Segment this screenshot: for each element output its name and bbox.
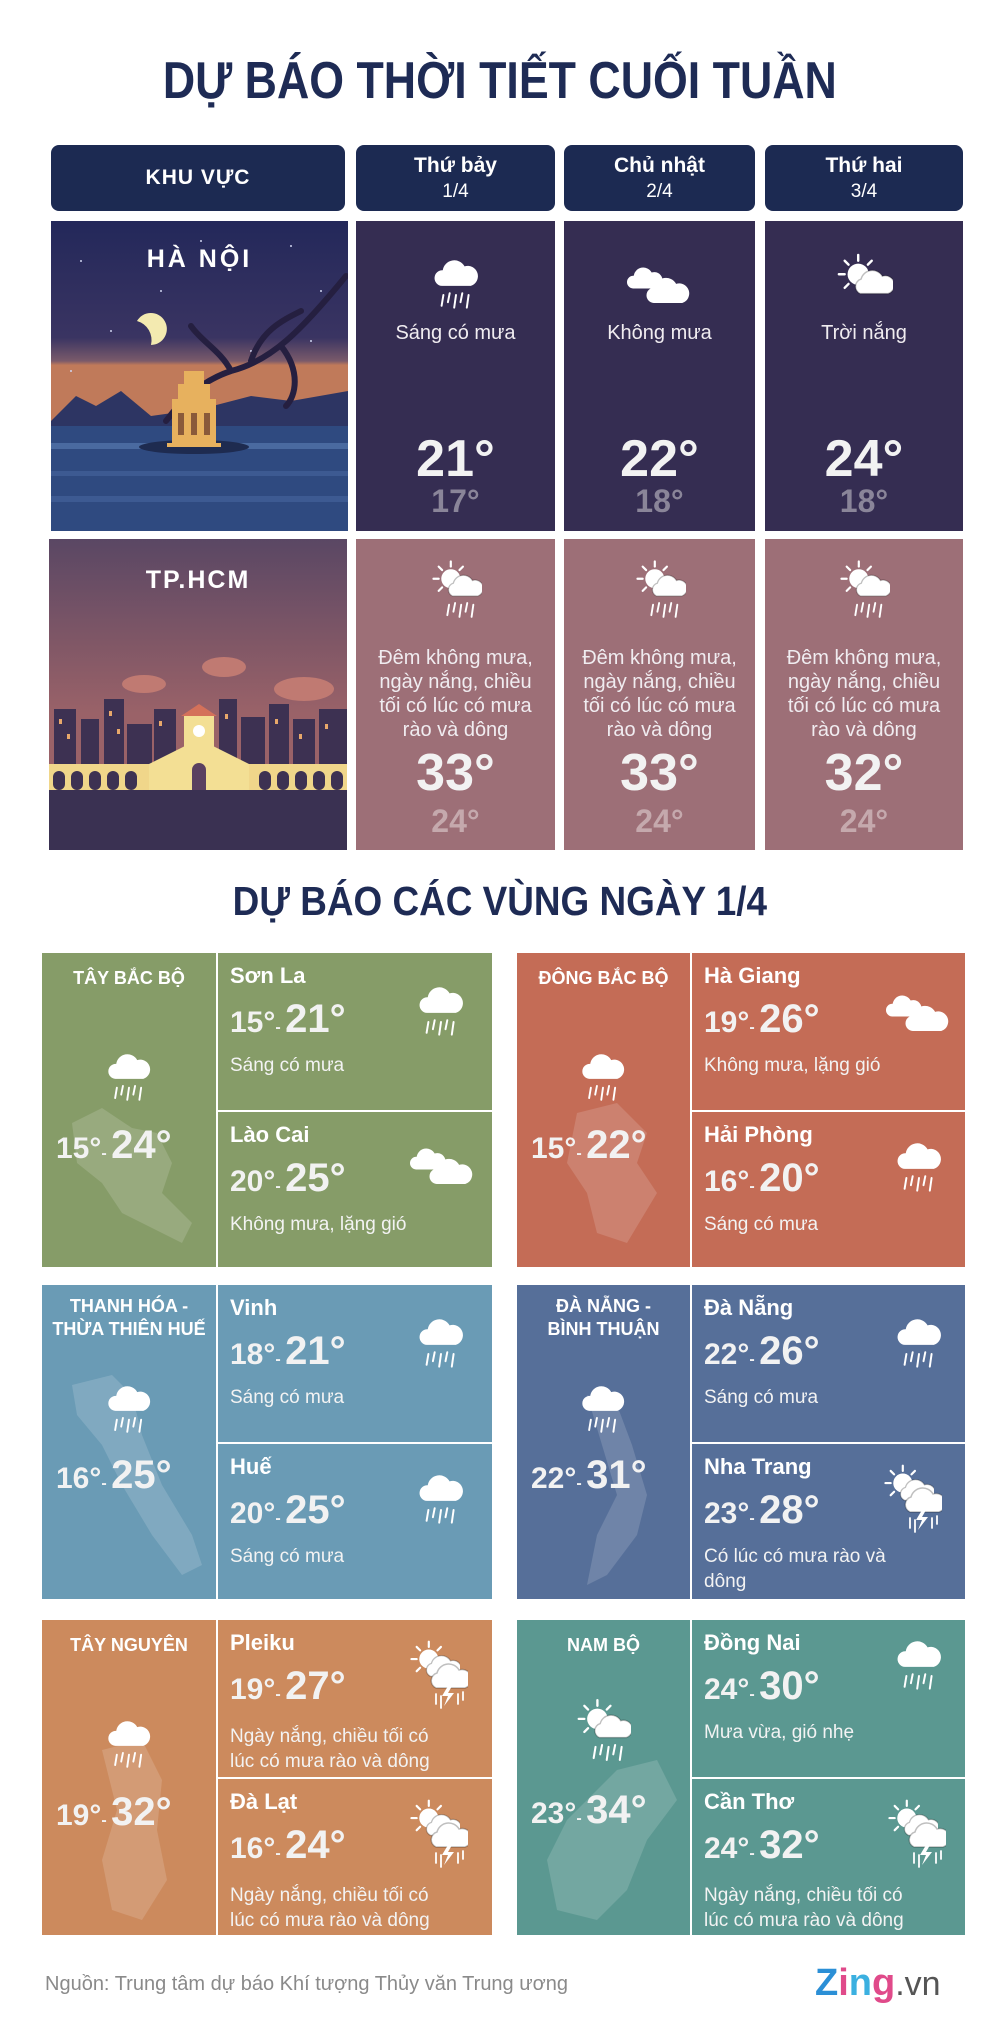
panel: tay nguyen: 19°- 27° (230, 1664, 346, 1708)
panel: dong bac bo (517, 953, 965, 1267)
panel: nam bo: lúc có mưa rào và dông (704, 1910, 904, 1931)
heading: regional forecast: DỰ BÁO CÁC VÙNG NGÀY 1/4 (233, 878, 767, 924)
panel: thanh hoa - thua thien hue: 18°- 21° (230, 1329, 346, 1373)
panel: tay bac bo: Sơn La (230, 963, 306, 988)
panel: tay nguyen: TÂY NGUYÊN (70, 1635, 188, 1655)
panel: ha noi saturday: 21° (416, 430, 495, 488)
header: chu nhat (564, 145, 755, 211)
panel: nam bo: 23°- 34° (531, 1788, 647, 1832)
panel: ha noi monday: 24° (825, 430, 903, 488)
header: chu nhat: Chủ nhật (614, 154, 705, 177)
logo: zing.vn: Zing.vn (815, 1962, 941, 2004)
panel: ha noi monday: 18° (840, 483, 888, 519)
panel: da nang - binh thuan: ĐÀ NẴNG - (556, 1296, 651, 1316)
panel: da nang - binh thuan (517, 1285, 965, 1599)
panel: hcm sunday: 33° (620, 744, 699, 802)
panel: tay nguyen: Ngày nắng, chiều tối có (230, 1726, 429, 1747)
panel: hcm monday: 32° (825, 744, 903, 802)
panel: tay bac bo: 15°- 24° (56, 1123, 172, 1167)
panel: nam bo: 24°- 30° (704, 1664, 820, 1708)
panel: hcm saturday: rào và dông (403, 719, 508, 741)
header: thu bay: Thứ bảy (414, 154, 497, 177)
panel: hcm sunday: rào và dông (607, 719, 712, 741)
header: khu vuc (51, 145, 345, 211)
label: tp.hcm: TP.HCM (146, 566, 250, 594)
panel: hcm saturday: 33° (416, 744, 495, 802)
panel: tay nguyen: Pleiku (230, 1630, 295, 1655)
panel: hcm monday: Đêm không mưa, (787, 647, 941, 669)
panel: tay bac bo: Lào Cai (230, 1122, 309, 1147)
panel: ha noi monday (765, 221, 963, 531)
panel: nam bo: Ngày nắng, chiều tối có (704, 1885, 903, 1906)
panel: da nang - binh thuan: Sáng có mưa (704, 1387, 818, 1408)
panel: ha noi illustration (51, 221, 348, 531)
panel: thanh hoa - thua thien hue: Sáng có mưa (230, 1546, 344, 1567)
panel: hcm saturday: tối có lúc có mưa (379, 695, 532, 717)
panel: da nang - binh thuan: Nha Trang (704, 1454, 812, 1479)
panel: dong bac bo: 15°- 22° (531, 1123, 647, 1167)
panel: tay bac bo: 20°- 25° (230, 1156, 346, 1200)
panel: hcm sunday: tối có lúc có mưa (583, 695, 736, 717)
panel: hcm monday: ngày nắng, chiều (788, 671, 940, 693)
panel: thanh hoa - thua thien hue (42, 1285, 492, 1599)
panel: tay bac bo: TÂY BẮC BỘ (73, 968, 185, 988)
panel: tay nguyen: lúc có mưa rào và dông (230, 1751, 430, 1772)
title: DỰ BÁO THỜI TIẾT CUỐI TUẦN (163, 52, 837, 110)
panel: dong bac bo: ĐÔNG BẮC BỘ (538, 968, 668, 988)
panel: thanh hoa - thua thien hue: THANH HÓA - (70, 1296, 188, 1316)
panel: tay nguyen: 19°- 32° (56, 1790, 172, 1834)
icon: sun cloud rain (840, 560, 890, 618)
panel: hcm monday: 24° (840, 803, 888, 839)
panel: tay bac bo (42, 953, 492, 1267)
panel: dong bac bo: Hà Giang (704, 963, 801, 988)
panel: dong bac bo: 16°- 20° (704, 1156, 820, 1200)
panel: dong bac bo: Không mưa, lặng gió (704, 1055, 880, 1076)
panel: nam bo: Đồng Nai (704, 1630, 801, 1655)
icon: clouds (627, 268, 690, 303)
panel: thanh hoa - thua thien hue: 16°- 25° (56, 1453, 172, 1497)
panel: tay nguyen: Ngày nắng, chiều tối có (230, 1885, 429, 1906)
panel: hcm saturday (356, 539, 555, 850)
panel: tay nguyen: lúc có mưa rào và dông (230, 1910, 430, 1931)
panel: hcm illustration (49, 539, 347, 850)
panel: ha noi sunday (564, 221, 755, 531)
header: thu hai: 3/4 (851, 181, 877, 202)
panel: da nang - binh thuan: 22°- 26° (704, 1329, 820, 1373)
panel: hcm sunday: Đêm không mưa, (582, 647, 737, 669)
panel: nam bo: NAM BỘ (567, 1635, 640, 1655)
panel: ha noi sunday: 22° (620, 430, 699, 488)
panel: da nang - binh thuan: Đà Nẵng (704, 1295, 793, 1320)
icon: rain cloud (434, 260, 478, 309)
panel: nam bo: 24°- 32° (704, 1823, 820, 1867)
panel: ha noi sunday: 18° (635, 483, 684, 519)
panel: tay nguyen: 16°- 24° (230, 1823, 346, 1867)
icon: sun cloud rain (432, 560, 482, 618)
header: thu hai (765, 145, 963, 211)
panel: da nang - binh thuan: BÌNH THUẬN (548, 1319, 660, 1339)
panel: da nang - binh thuan: Có lúc có mưa rào và (704, 1546, 886, 1567)
panel: hcm sunday (564, 539, 755, 850)
panel: nam bo: Cần Thơ (704, 1789, 794, 1814)
panel: tay bac bo: Không mưa, lặng gió (230, 1214, 406, 1235)
panel: hcm monday (765, 539, 963, 850)
panel: hcm saturday: ngày nắng, chiều (379, 671, 532, 693)
panel: ha noi saturday: Sáng có mưa (395, 322, 516, 344)
panel: hcm saturday: 24° (431, 803, 480, 839)
panel: hcm monday: tối có lúc có mưa (788, 695, 940, 717)
panel: hcm sunday: 24° (635, 803, 684, 839)
panel: tay nguyen (42, 1620, 492, 1935)
header: thu bay: 1/4 (442, 181, 469, 202)
panel: thanh hoa - thua thien hue: THỪA THIÊN HUẾ (52, 1319, 206, 1339)
panel: nam bo: Mưa vừa, gió nhẹ (704, 1722, 854, 1743)
panel: dong bac bo: Hải Phòng (704, 1122, 813, 1147)
panel: thanh hoa - thua thien hue: Vinh (230, 1295, 277, 1320)
panel: hcm saturday: Đêm không mưa, (378, 647, 533, 669)
panel: ha noi monday: Trời nắng (821, 322, 907, 344)
header: khu vuc: KHU VỰC (146, 166, 250, 189)
header: chu nhat: 2/4 (646, 181, 673, 202)
panel: tay nguyen: Đà Lạt (230, 1789, 297, 1814)
panel: thanh hoa - thua thien hue: Sáng có mưa (230, 1387, 344, 1408)
icon: sun cloud (838, 254, 893, 294)
icon: sun cloud rain (636, 560, 686, 618)
panel: dong bac bo: 19°- 26° (704, 997, 820, 1041)
footer: source: Nguồn: Trung tâm dự báo Khí tượng Thủy văn Trung ương (45, 1973, 568, 1995)
panel: tay bac bo: Sáng có mưa (230, 1055, 344, 1076)
panel: tay bac bo: 15°- 21° (230, 997, 346, 1041)
panel: da nang - binh thuan: 23°- 28° (704, 1488, 820, 1532)
panel: dong bac bo: Sáng có mưa (704, 1214, 818, 1235)
header: thu bay (356, 145, 555, 211)
panel: thanh hoa - thua thien hue: Huế (230, 1454, 272, 1479)
label: ha noi: HÀ NỘI (147, 245, 252, 273)
panel: hcm monday: rào và dông (811, 719, 917, 741)
panel: ha noi saturday: 17° (431, 483, 480, 519)
panel: ha noi saturday (356, 221, 555, 531)
panel: hcm sunday: ngày nắng, chiều (583, 671, 736, 693)
panel: da nang - binh thuan: dông (704, 1571, 746, 1592)
panel: da nang - binh thuan: 22°- 31° (531, 1453, 647, 1497)
panel: nam bo (517, 1620, 965, 1935)
header: thu hai: Thứ hai (825, 154, 903, 177)
panel: thanh hoa - thua thien hue: 20°- 25° (230, 1488, 346, 1532)
panel: ha noi sunday: Không mưa (607, 322, 712, 344)
